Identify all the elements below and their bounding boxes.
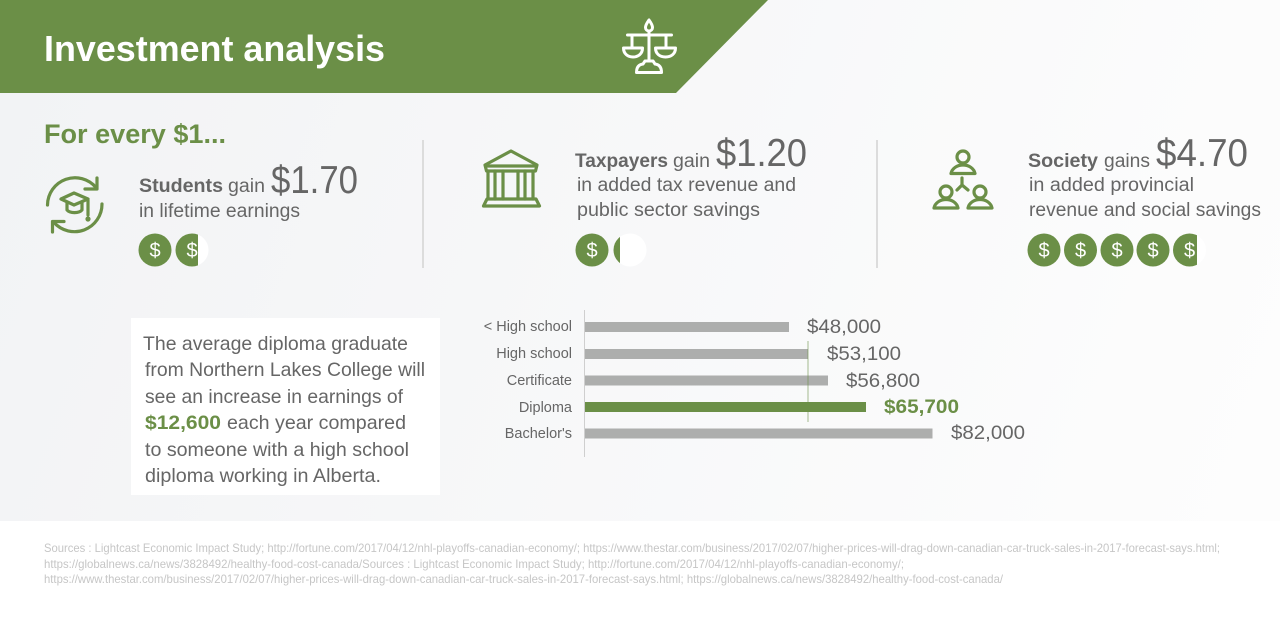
category labels: < High school xyxy=(484,319,572,335)
panel: taxpayers xyxy=(484,132,807,266)
students text: gain xyxy=(228,176,265,197)
header banner xyxy=(0,0,768,93)
callout: average diploma graduate: to someone with a high school xyxy=(145,439,409,461)
value labels: $65,700 xyxy=(884,396,959,418)
category labels: Bachelor's xyxy=(505,426,572,442)
callout: average diploma graduate: see an increase in earnings of xyxy=(145,386,404,408)
dollar coins: society: $ xyxy=(1075,240,1086,262)
dollar coins: society: $ xyxy=(1111,240,1123,262)
dollar coins: students: $ xyxy=(186,240,198,262)
value labels: $48,000 xyxy=(807,316,881,338)
category labels: High school xyxy=(496,346,572,362)
sources: https://www.thestar.com/business/2017/02/07/higher-prices-will-drag-down-canadian-car-truck-sales-in-2017-forecast-says.html; https://globalnews.ca/news/3828492/healthy-food-cost-canada/ xyxy=(44,572,1004,586)
category labels: Diploma xyxy=(519,400,573,416)
callout: average diploma graduate: each year compared xyxy=(227,412,406,434)
heading: for every $1: For every $1... xyxy=(44,119,226,149)
icon: graduate cap in arrows xyxy=(48,178,102,232)
bars xyxy=(585,322,932,438)
dollar coins: students: $ xyxy=(149,240,161,262)
students text: in lifetime earnings xyxy=(139,201,300,222)
dollar coins: society: $ xyxy=(1038,240,1050,262)
dollar coins: taxpayers: $ xyxy=(586,240,598,262)
callout: average diploma graduate xyxy=(131,318,440,495)
students text xyxy=(139,159,358,222)
taxpayers text: public sector savings xyxy=(577,200,760,221)
category labels xyxy=(484,319,573,442)
society text: Society xyxy=(1028,151,1098,172)
bar chart: earnings by education xyxy=(484,310,1025,457)
society text: in added provincial xyxy=(1029,175,1194,196)
taxpayers text: in added tax revenue and xyxy=(577,175,796,196)
dollar coins: students xyxy=(138,234,208,266)
society text: gains xyxy=(1104,151,1150,172)
sources xyxy=(44,541,1220,586)
students text: Students xyxy=(139,176,223,197)
society text: $4.70 xyxy=(1156,132,1248,175)
callout: average diploma graduate: diploma working in Alberta. xyxy=(145,465,381,487)
sources: Sources : Lightcast Economic Impact Study; http://fortune.com/2017/04/12/nhl-playoffs-canadian-economy/; https://www.thestar.com/business/2017/02/07/higher-prices-will-drag-down-canadian-car-truck-sales-in-2017-forecast-says.html; xyxy=(44,541,1220,555)
dollar coins: taxpayers xyxy=(576,234,620,266)
callout: average diploma graduate: $12,600 xyxy=(145,412,221,434)
panel: society xyxy=(934,132,1261,266)
icon: connected people xyxy=(934,151,992,208)
society text: revenue and social savings xyxy=(1029,200,1261,221)
value labels: $53,100 xyxy=(827,343,901,365)
panel: students xyxy=(48,159,358,266)
category labels: Certificate xyxy=(507,373,572,389)
title: Investment analysis xyxy=(44,28,385,69)
society text xyxy=(1028,132,1261,221)
dollar coins: society: $ xyxy=(1147,240,1159,262)
callout: average diploma graduate: The average diploma graduate xyxy=(143,333,408,355)
sources: https://globalnews.ca/news/3828492/healthy-food-cost-canada/Sources : Lightcast Economic Impact Study; http://fortune.com/2017/04/12/nhl-playoffs-canadian-economy/; xyxy=(44,557,904,571)
taxpayers text: gain xyxy=(673,151,710,172)
callout: average diploma graduate: from Northern Lakes College will xyxy=(145,359,425,381)
value labels: $82,000 xyxy=(951,422,1025,444)
dollar coins: society: $ xyxy=(1184,240,1195,262)
taxpayers text: Taxpayers xyxy=(575,151,668,172)
value labels xyxy=(807,316,1025,444)
value labels: $56,800 xyxy=(846,370,920,392)
taxpayers text: $1.20 xyxy=(716,132,807,175)
icon: balance scales xyxy=(624,20,676,72)
dollar coins: society xyxy=(1028,234,1206,266)
taxpayers text xyxy=(575,132,807,221)
students text: $1.70 xyxy=(271,159,358,202)
icon: bank building xyxy=(484,151,540,206)
